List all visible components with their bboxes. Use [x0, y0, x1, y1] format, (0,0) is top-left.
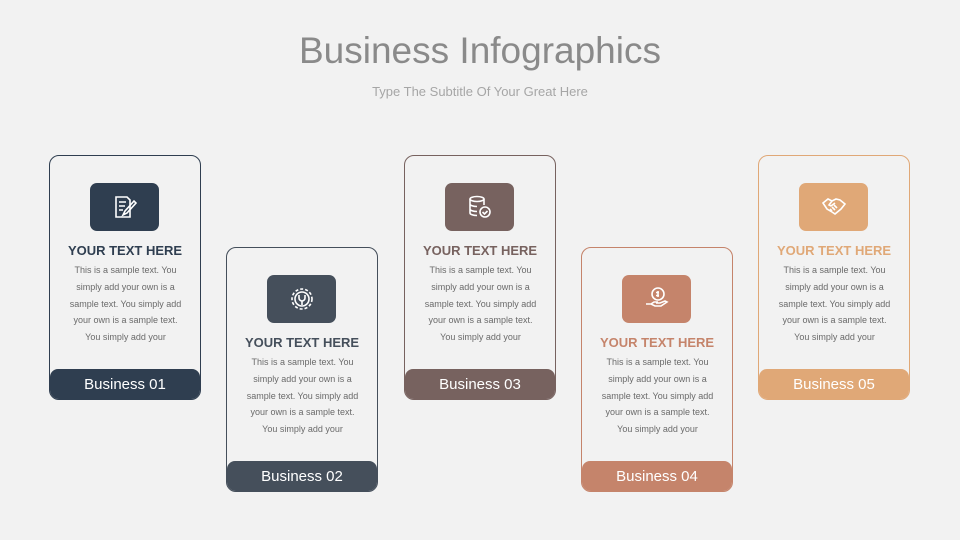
panel: business 03 — [404, 155, 556, 400]
icon: database check — [445, 183, 514, 231]
heading: YOUR TEXT HERE — [777, 243, 891, 258]
text block: This is a sample text. You simply add your own is a sample text. You simply add your own is a sample text. You simply add your — [779, 265, 890, 342]
heading: YOUR TEXT HERE — [423, 243, 537, 258]
text block: This is a sample text. You simply add your own is a sample text. You simply add your own is a sample text. You simply add your — [425, 265, 536, 342]
footer label: Business 02 — [261, 468, 343, 485]
heading: YOUR TEXT HERE — [68, 243, 182, 258]
text block: This is a sample text. You simply add your own is a sample text. You simply add your own is a sample text. You simply add your — [70, 265, 181, 342]
footer label — [582, 461, 732, 491]
panel: business 05 — [758, 155, 910, 400]
footer label: Business 03 — [439, 376, 521, 393]
title: Business Infographics — [299, 30, 661, 71]
footer label: Business 01 — [84, 376, 166, 393]
icon: gear wrench — [267, 275, 336, 323]
panel: business 04 — [581, 247, 733, 492]
panel: business 01 — [49, 155, 201, 400]
footer label — [50, 369, 200, 399]
subtitle: Type The Subtitle Of Your Great Here — [372, 84, 588, 99]
icon: handshake — [799, 183, 868, 231]
footer label: Business 05 — [793, 376, 875, 393]
footer label: Business 04 — [616, 468, 698, 485]
text block: This is a sample text. You simply add your own is a sample text. You simply add your own is a sample text. You simply add your — [247, 357, 358, 434]
text block: This is a sample text. You simply add your own is a sample text. You simply add your own is a sample text. You simply add your — [602, 357, 713, 434]
heading: YOUR TEXT HERE — [245, 335, 359, 350]
footer label — [227, 461, 377, 491]
icon: hand with coin — [622, 275, 691, 323]
footer label — [405, 369, 555, 399]
panel: business 02 — [226, 247, 378, 492]
icon: document with pen — [90, 183, 159, 231]
footer label — [759, 369, 909, 399]
heading: YOUR TEXT HERE — [600, 335, 714, 350]
